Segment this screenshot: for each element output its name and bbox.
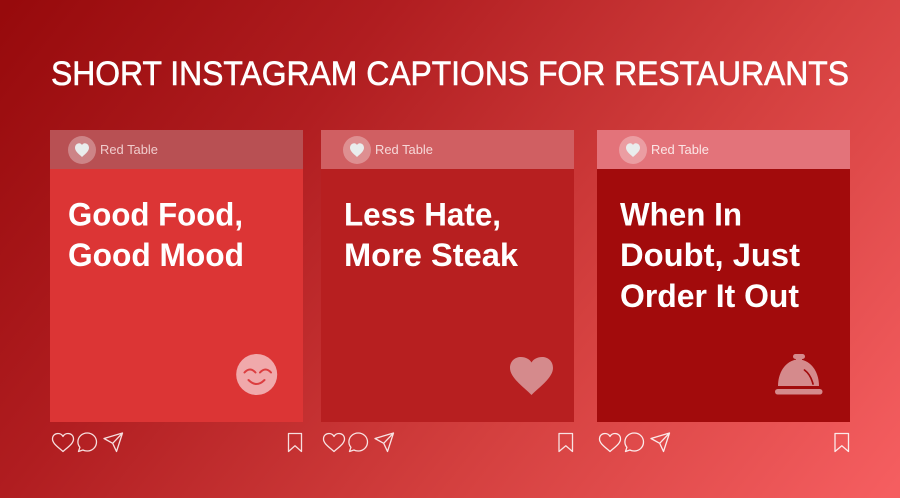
- card 3 caption: Order It Out: [620, 278, 799, 314]
- card 2 avatar: [343, 136, 371, 164]
- card 3 brand name: Red Table: [651, 143, 709, 157]
- icon: comment: [349, 433, 367, 452]
- icon: like: [52, 434, 74, 452]
- card 1 caption: Good Mood: [68, 237, 244, 273]
- icon: smiley: [236, 354, 277, 395]
- icon: like: [324, 434, 344, 452]
- icon row: card 3 actions: [600, 433, 848, 452]
- icon: share: [375, 433, 394, 452]
- card 2 caption: More Steak: [344, 237, 518, 273]
- panel: card 2: [321, 130, 574, 422]
- card 2 brand name: Red Table: [375, 143, 433, 157]
- card 2 body: [321, 130, 574, 422]
- icon: comment: [625, 433, 644, 452]
- icon: comment: [78, 433, 97, 452]
- card 1 caption: Good Food,: [68, 196, 243, 232]
- card 3 avatar: [619, 136, 647, 164]
- card 1 header bar: [50, 130, 303, 169]
- card 3 header bar: [597, 130, 850, 169]
- card 1 body: [50, 130, 303, 422]
- icon: service bell: [775, 354, 822, 394]
- icon: share: [104, 433, 122, 452]
- card 2 header bar: [321, 130, 574, 169]
- icon row: card 2 actions: [324, 433, 572, 452]
- card 3 caption: Doubt, Just: [620, 237, 800, 273]
- icon: large heart: [510, 357, 553, 395]
- icon: bookmark: [835, 434, 848, 452]
- icon: bookmark: [559, 434, 572, 452]
- card 3 body: [597, 130, 850, 422]
- icon: like: [600, 434, 620, 452]
- icon: bookmark: [288, 434, 302, 452]
- panel: card 1: [50, 130, 303, 422]
- icon row: card 1 actions: [52, 433, 302, 452]
- card 1 avatar: [68, 136, 96, 164]
- icon: share: [651, 433, 670, 452]
- card 2 caption: Less Hate,: [344, 196, 501, 232]
- title: SHORT INSTAGRAM CAPTIONS FOR RESTAURANTS: [51, 55, 849, 93]
- card 1 brand name: Red Table: [100, 143, 158, 157]
- panel: card 3: [597, 130, 850, 422]
- card 3 caption: When In: [620, 196, 742, 232]
